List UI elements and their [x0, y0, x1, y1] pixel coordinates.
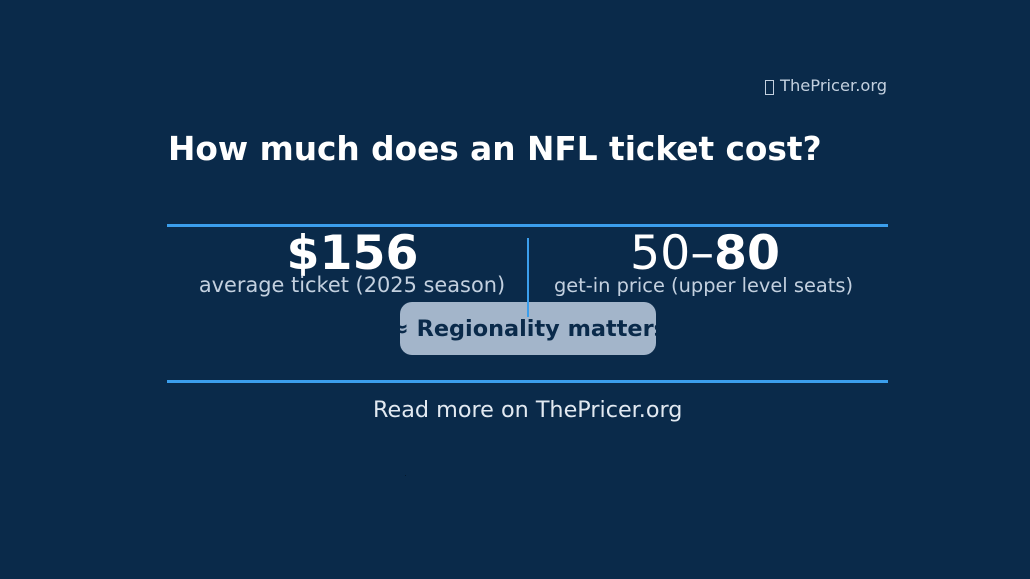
- brand label: ThePricer.org: [780, 76, 887, 95]
- icon: missing glyph box: [765, 80, 774, 95]
- stat: average ticket: [199, 226, 505, 297]
- stat: get-in price: [554, 226, 853, 297]
- footer link text: Read more on ThePricer.org: [373, 397, 682, 423]
- title: How much does an NFL ticket cost?: [168, 130, 822, 168]
- average ticket caption: average ticket (2025 season): [199, 273, 505, 297]
- get-in price value: 50–80: [630, 226, 780, 281]
- get-in price caption: get-in price (upper level seats): [554, 274, 853, 297]
- callout pill: [400, 302, 656, 355]
- average ticket value: $156: [287, 226, 418, 281]
